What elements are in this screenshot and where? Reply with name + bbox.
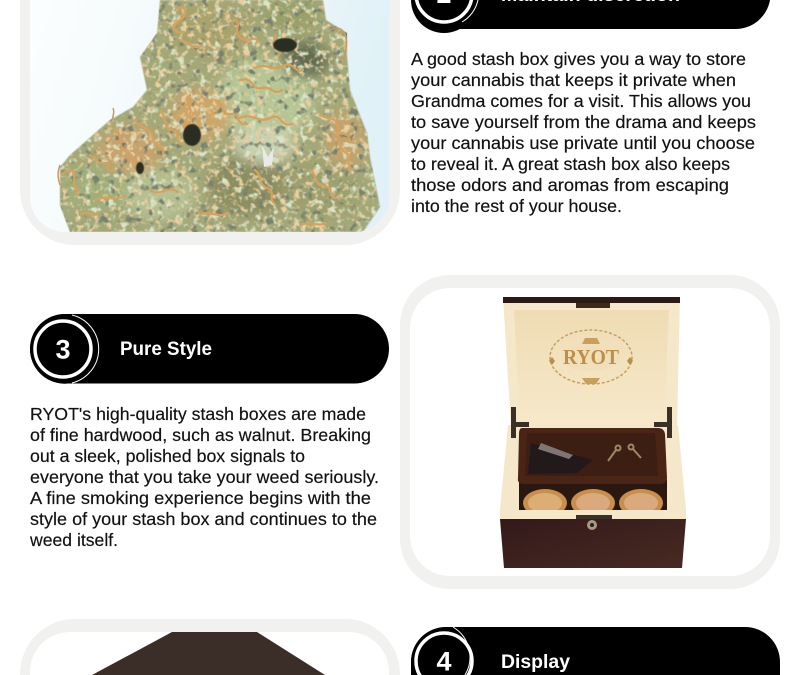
logo: RYOT engraving: RYOT bbox=[563, 345, 619, 369]
text block: section 2 paragraph: to save yourself from the drama and keeps bbox=[411, 112, 756, 132]
panel: cannabis bud photo bbox=[20, 0, 400, 245]
text block: section 3 paragraph: out a sleek, polished box signals to bbox=[30, 446, 305, 466]
tray with papers and keys bbox=[518, 428, 667, 484]
text block: section 3 paragraph: A fine smoking experience begins with the bbox=[30, 488, 371, 508]
section 3 header pill bbox=[30, 314, 389, 384]
number badge 3 bbox=[30, 314, 99, 384]
text block: section 2 paragraph: Grandma comes for a visit. This allows you bbox=[411, 91, 751, 111]
text block: section 3 paragraph: style of your stash box and continues to the bbox=[30, 509, 377, 529]
photo: cannabis bud bbox=[30, 0, 389, 232]
section 4 header pill bbox=[411, 627, 780, 675]
heading: Display: Display bbox=[501, 651, 570, 673]
panel: RYOT box photo bbox=[400, 275, 780, 589]
logo: RYOT engraving bbox=[549, 330, 633, 384]
text block: section 2 paragraph: your cannabis use private until you choose bbox=[411, 133, 755, 153]
photo: dark wood lid bbox=[92, 632, 325, 675]
text block: section 2 paragraph: those odors and aromas from escaping bbox=[411, 175, 729, 195]
section 2 header pill bbox=[411, 0, 770, 33]
text block: section 2 paragraph bbox=[411, 49, 756, 216]
text block: section 2 paragraph: A good stash box gives you a way to store bbox=[411, 49, 746, 69]
text block: section 3 paragraph: of fine hardwood, such as walnut. Breaking bbox=[30, 425, 371, 445]
number badge 3: 3 bbox=[55, 334, 71, 364]
text block: section 2 paragraph: your cannabis that keeps it private when bbox=[411, 70, 736, 90]
text block: section 3 paragraph bbox=[29, 404, 379, 550]
number badge 2 bbox=[411, 0, 478, 33]
text block: section 3 paragraph: RYOT's high-quality stash boxes are made bbox=[30, 404, 366, 424]
wooden jars bbox=[523, 489, 663, 517]
hinges and latch bbox=[511, 407, 672, 530]
panel: wood box lid photo bbox=[20, 619, 400, 675]
text block: section 2 paragraph: into the rest of your house. bbox=[411, 196, 622, 216]
text block: section 3 paragraph: everyone that you take your weed seriously. bbox=[30, 467, 379, 487]
number badge 4 bbox=[411, 627, 480, 675]
text block: section 2 paragraph: to reveal it. A great stash box also keeps bbox=[411, 154, 730, 174]
box base bbox=[500, 519, 686, 568]
photo: open RYOT stash box bbox=[500, 297, 686, 568]
text block: section 3 paragraph: weed itself. bbox=[29, 530, 118, 550]
heading: Pure Style: Pure Style bbox=[120, 338, 212, 360]
